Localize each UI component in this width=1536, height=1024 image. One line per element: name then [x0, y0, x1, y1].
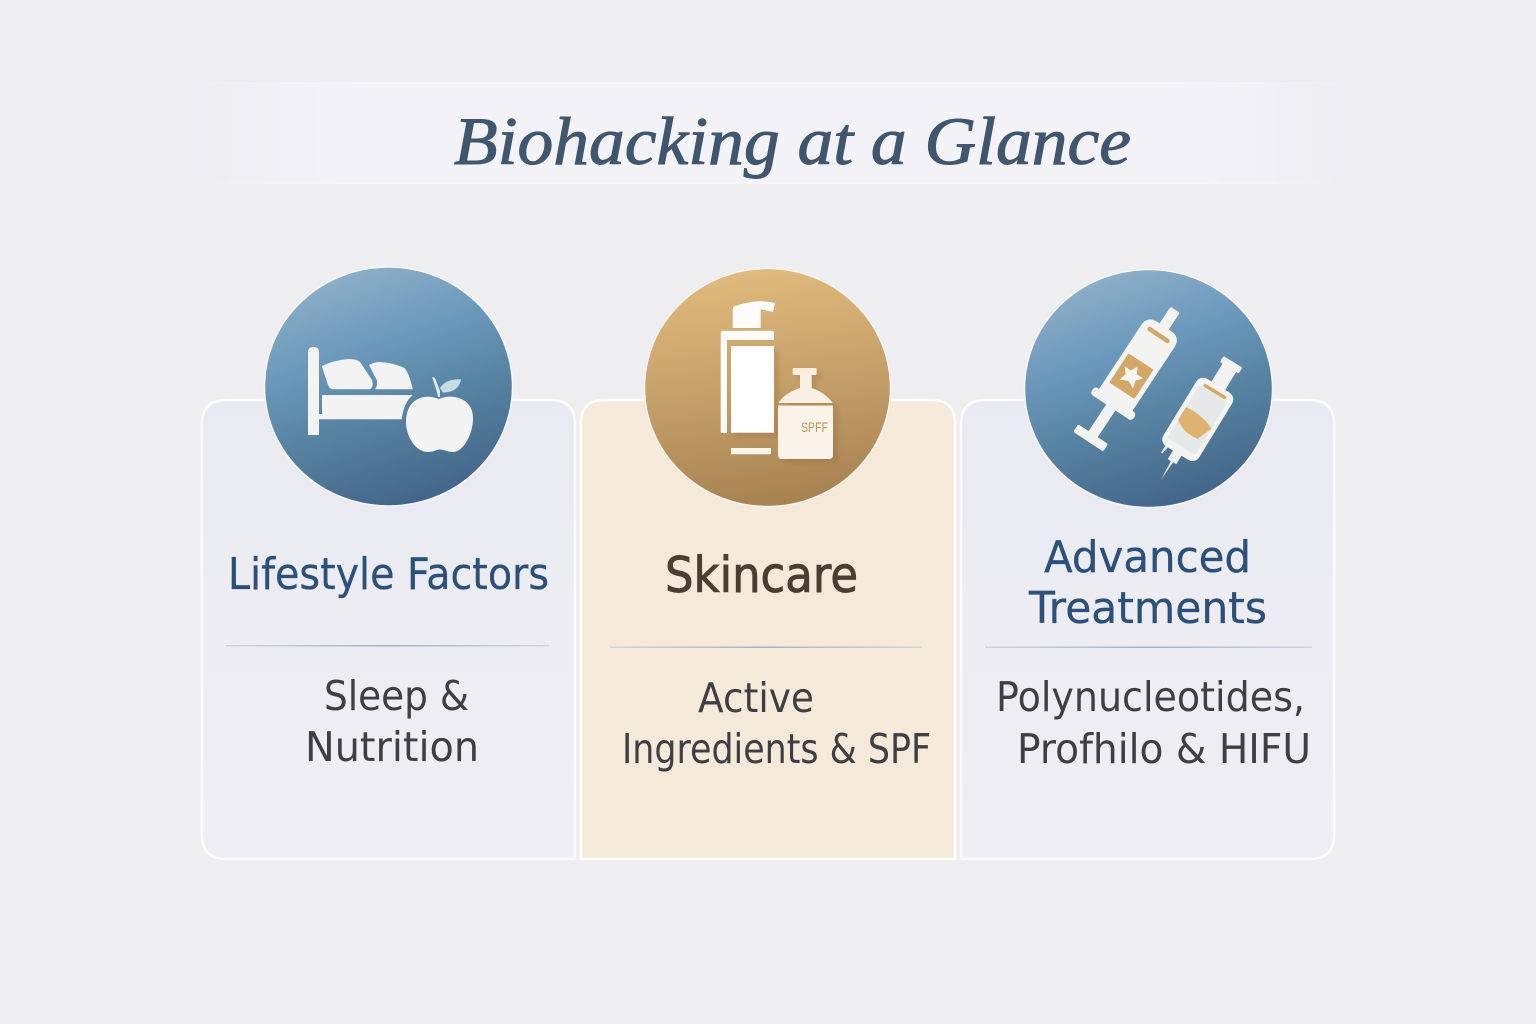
text: sleep and nutrition: Sleep & [324, 672, 469, 720]
text: sleep and nutrition [305, 672, 479, 771]
text: active ingredients and spf: Active [698, 674, 814, 722]
heading: advanced treatments [1028, 532, 1267, 634]
panel: lifestyle factors [202, 267, 575, 859]
text: active ingredients and spf [622, 674, 931, 773]
heading: advanced treatments: Treatments [1028, 583, 1267, 634]
heading: lifestyle factors: Lifestyle Factors [228, 549, 549, 600]
icon: skincare bottles: SPFF [801, 419, 828, 435]
icon: syringes [1024, 270, 1272, 508]
text: polynucleotides, profhilo and hifu: Profhilo & HIFU [1017, 725, 1311, 773]
text: active ingredients and spf: Ingredients & SPF [622, 725, 931, 773]
panel: advanced treatments [961, 270, 1334, 859]
heading: skincare: Skincare [665, 547, 858, 604]
panel: skincare [581, 268, 955, 859]
heading: advanced treatments: Advanced [1044, 532, 1251, 583]
title: Biohacking at a Glance [454, 103, 1131, 179]
text: sleep and nutrition: Nutrition [305, 723, 479, 771]
text: polynucleotides, profhilo and hifu [996, 673, 1311, 773]
title [190, 82, 1350, 184]
text: polynucleotides, profhilo and hifu: Polynucleotides, [996, 673, 1305, 721]
icon: bed and apple [264, 267, 512, 506]
icon: skincare bottles [644, 268, 890, 506]
